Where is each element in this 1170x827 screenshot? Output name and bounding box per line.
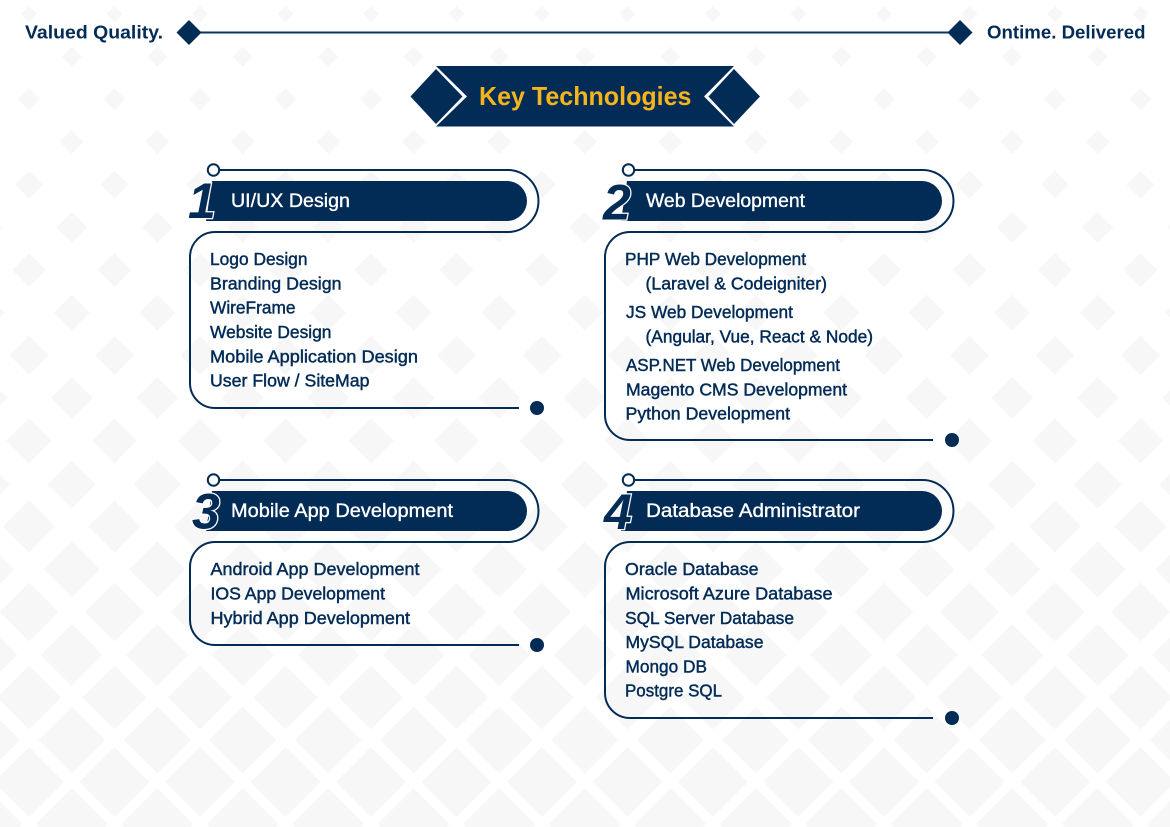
number 2: 2 (602, 174, 631, 230)
panel 3: Mobile App Development (190, 474, 544, 652)
title text: Key Technologies (479, 81, 692, 111)
list: SQL Server Database (625, 608, 794, 628)
end dot (530, 638, 544, 652)
panel 2: Web Development (602, 164, 959, 447)
tagline: Valued Quality: Valued Quality. (25, 22, 163, 42)
list: Android App Development (210, 559, 420, 579)
heading bar (621, 181, 942, 221)
list: JS Web Development (626, 302, 793, 322)
list: Magento CMS Development (626, 379, 847, 399)
right diamond (708, 69, 760, 124)
panel outline (605, 480, 953, 718)
list: User Flow / SiteMap (210, 371, 370, 391)
start node (623, 164, 634, 176)
heading: Database Administrator (646, 501, 861, 522)
list: PHP Web Development (625, 249, 806, 269)
number 1: 1 (188, 173, 216, 229)
header strip (25, 20, 1146, 45)
number 4: 4 (603, 484, 632, 540)
heading bar (206, 181, 527, 221)
list: Logo Design (210, 249, 308, 269)
panel 4: Database Administrator (603, 474, 959, 725)
list: Mobile Application Design (210, 346, 418, 366)
list: MySQL Database (626, 632, 764, 652)
start node (623, 474, 634, 486)
list: Oracle Database (625, 559, 758, 579)
list: WireFrame (210, 298, 296, 318)
list (625, 559, 832, 701)
list: IOS App Development (210, 584, 385, 604)
list: (Laravel & Codeigniter) (646, 274, 827, 294)
panel 1: UI/UX Design (188, 164, 544, 415)
list: Mongo DB (626, 656, 707, 676)
number 3: 3 (192, 484, 220, 540)
end dot (945, 433, 959, 447)
end dot (945, 711, 959, 725)
heading: Web Development (646, 191, 806, 212)
heading: UI/UX Design (231, 191, 350, 212)
left diamond (410, 69, 462, 124)
list: Hybrid App Development (210, 608, 410, 628)
end dot (530, 401, 544, 415)
list: Website Design (210, 322, 332, 342)
heading bar (206, 491, 527, 531)
title ribbon (436, 66, 734, 126)
list (210, 249, 418, 391)
list (625, 249, 873, 424)
panel outline (605, 170, 953, 440)
title banner (410, 66, 760, 126)
list: Python Development (626, 404, 790, 424)
panel outline (190, 170, 538, 408)
heading: Mobile App Development (231, 501, 454, 522)
list (210, 559, 420, 628)
panel outline (190, 480, 538, 645)
connector line with end diamonds (176, 20, 972, 45)
list: (Angular, Vue, React & Node) (646, 326, 873, 346)
list: Branding Design (210, 273, 342, 293)
list: Postgre SQL (625, 681, 722, 701)
tagline: Ontime Delivered: Ontime. Delivered (987, 22, 1146, 42)
list: ASP.NET Web Development (626, 355, 840, 375)
start node (208, 474, 219, 486)
heading bar (621, 491, 942, 531)
start node (208, 164, 219, 176)
list: Microsoft Azure Database (626, 584, 832, 604)
